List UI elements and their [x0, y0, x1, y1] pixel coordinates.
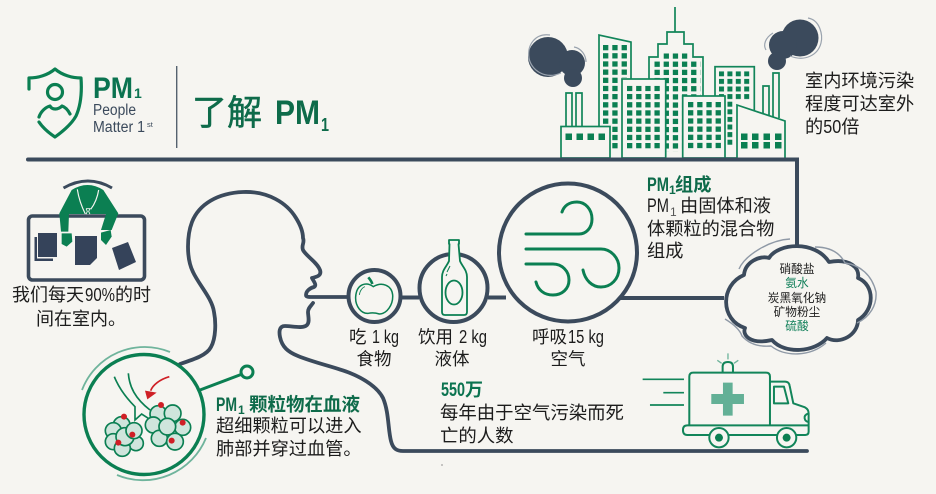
icon: air circle [499, 184, 637, 322]
label: air [532, 327, 604, 369]
label: air: 15 kg [568, 327, 604, 347]
building back right [715, 67, 754, 158]
text: indoor pollution: 室内环境污染 [805, 71, 914, 91]
text: indoor pollution [805, 71, 914, 137]
cloud: components: 氨水 [785, 277, 809, 290]
stray dot [442, 464, 443, 466]
text: 5.5 million deaths [440, 380, 624, 446]
cloud: components: 硫酸 [785, 319, 809, 333]
label: air: 空气 [550, 349, 586, 369]
building 2 [599, 35, 631, 158]
text: PM1 composition: 组成 [647, 241, 683, 261]
text: indoor pollution: 的50倍 [805, 117, 859, 137]
text: PM1 composition: 1 [669, 183, 676, 197]
label: liquid: 饮用 [418, 327, 453, 347]
logo text [93, 72, 154, 136]
label: liquid: 液体 [434, 349, 470, 369]
text: PM1 composition: PM [647, 175, 669, 196]
text: 5.5 million deaths: 每年由于空气污染而死 [440, 402, 624, 423]
label: liquid [418, 327, 487, 369]
icon: shield with person [29, 69, 81, 137]
smoke left [528, 35, 586, 87]
right chimneys [763, 73, 779, 118]
tower [649, 7, 703, 98]
text: PM1 in blood: 超细颗粒可以进入 [216, 416, 362, 436]
text: PM1 composition: 1 [670, 205, 677, 219]
cloud: components: 矿物粉尘 [774, 305, 821, 319]
text: PM1 in blood: 颗粒物在血液 [249, 394, 361, 415]
label: food: 食物 [356, 349, 392, 369]
icon: lung circle [82, 347, 253, 480]
text: PM1 composition: 由固体和液 [680, 196, 771, 216]
text: PM1 in blood: 1 [238, 403, 245, 417]
text: PM1 composition: 组成 [675, 174, 711, 195]
right factory [737, 105, 785, 158]
title [192, 94, 329, 135]
label: air: 呼吸 [532, 327, 567, 347]
cloud: components: 硝酸盐 [779, 262, 815, 276]
logo: PM1 People Matter 1st [29, 69, 154, 137]
labels: intake amounts [349, 327, 604, 369]
text: PM1 composition: 体颗粒的混合物 [647, 219, 774, 239]
label: food: 1 kg [372, 327, 399, 347]
building 3 [622, 79, 666, 158]
text: PM1 in blood: 肺部并穿过血管。 [216, 439, 362, 459]
logo text: 1 [134, 85, 142, 101]
text: PM1 composition [647, 174, 774, 261]
divider [176, 66, 177, 148]
text: 5.5 million deaths: 亡的人数 [440, 425, 514, 446]
city skyline [561, 7, 785, 158]
logo text: People [93, 102, 136, 119]
text: 90% indoors: 90% [85, 285, 115, 305]
icon: apple circle [348, 270, 400, 322]
building 5 [683, 96, 725, 158]
left factory chimneys [566, 93, 582, 126]
icon: person at desk [28, 181, 144, 280]
cloud: components [725, 239, 876, 354]
text: 90% indoors: 我们每天 [12, 285, 84, 305]
cloud: components: 炭黑氧化钠 [768, 291, 826, 305]
label: liquid: 2 kg [459, 327, 487, 347]
text: 5.5 million deaths: 550 [441, 380, 465, 401]
title: PM [275, 94, 320, 132]
text: 90% indoors: 的时 [115, 285, 151, 305]
logo text: PM [93, 72, 133, 105]
icon: ambulance [643, 353, 809, 447]
text: 90% indoors: 间在室内。 [36, 309, 126, 329]
smoke right [765, 18, 822, 70]
logo text: Matter 1 [93, 119, 145, 136]
title: 1 [321, 115, 329, 135]
text: PM1 in blood [216, 394, 362, 459]
icon: bottle circle [420, 240, 488, 322]
text: indoor pollution: 程度可达室外 [805, 94, 914, 114]
text: PM1 in blood: PM [216, 395, 237, 416]
left factory [561, 126, 610, 158]
top connector line [28, 160, 797, 246]
title: 了解 [192, 94, 262, 133]
label: food: 吃 [349, 327, 366, 347]
text: PM1 composition: PM [647, 196, 669, 217]
logo text: st [147, 120, 154, 129]
text: 5.5 million deaths: 万 [465, 380, 483, 400]
label: food [349, 327, 399, 369]
head profile outline [180, 192, 807, 451]
connector to cloud [402, 296, 724, 300]
text: 90% indoors [12, 285, 151, 329]
